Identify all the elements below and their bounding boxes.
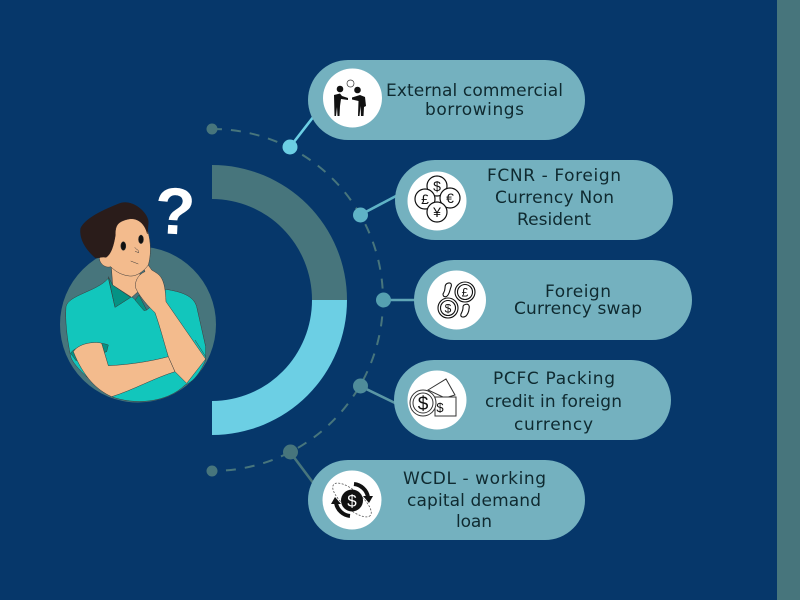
label (487, 166, 621, 230)
label: External commercial (386, 81, 563, 101)
icon: four currency coins: $ (433, 178, 441, 194)
label (403, 469, 546, 532)
label: Foreign (545, 282, 611, 302)
label: Currency Non (495, 188, 614, 208)
icon: dollar coin with circular arrows: $ (347, 492, 357, 510)
label: capital demand (407, 491, 541, 511)
label (485, 369, 622, 435)
panel: WCDL (308, 460, 585, 540)
label: Resident (517, 210, 591, 230)
label: WCDL - working (403, 469, 546, 489)
half ring chart (212, 165, 347, 435)
label: FCNR - Foreign (487, 166, 621, 186)
icon: four currency coins (415, 176, 460, 222)
label: loan (456, 512, 492, 532)
label: Currency swap (514, 299, 642, 319)
panel: external commercial borrowings (308, 60, 585, 140)
icon: swapping coins: £ (462, 286, 469, 300)
panel: FCNR (395, 160, 673, 240)
right side band (777, 0, 800, 600)
label: credit in foreign (485, 392, 622, 412)
question mark: ? (153, 173, 197, 249)
icon: four currency coins: € (446, 190, 454, 206)
panel: PCFC packing credit (394, 360, 671, 440)
icon: four currency coins: ¥ (432, 204, 441, 220)
icon: coin and banknotes: $ (418, 394, 429, 415)
icon: coin and banknotes (410, 379, 456, 416)
label (386, 81, 563, 120)
panel: foreign currency swap (414, 260, 692, 340)
icon: coin and banknotes: $ (436, 400, 444, 415)
icon: swapping coins: $ (445, 302, 452, 316)
label: borrowings (425, 100, 524, 120)
icon: four currency coins: £ (421, 191, 429, 207)
icon: dollar coin with circular arrows (328, 478, 376, 522)
icon: swapping coins (438, 282, 475, 318)
label: currency (514, 415, 593, 435)
dashed timeline arc with nodes (206, 116, 415, 484)
label: PCFC Packing (493, 369, 615, 389)
icon: two people exchanging money (334, 80, 366, 116)
label (514, 282, 642, 319)
icon: thinking person with question mark (60, 173, 216, 402)
